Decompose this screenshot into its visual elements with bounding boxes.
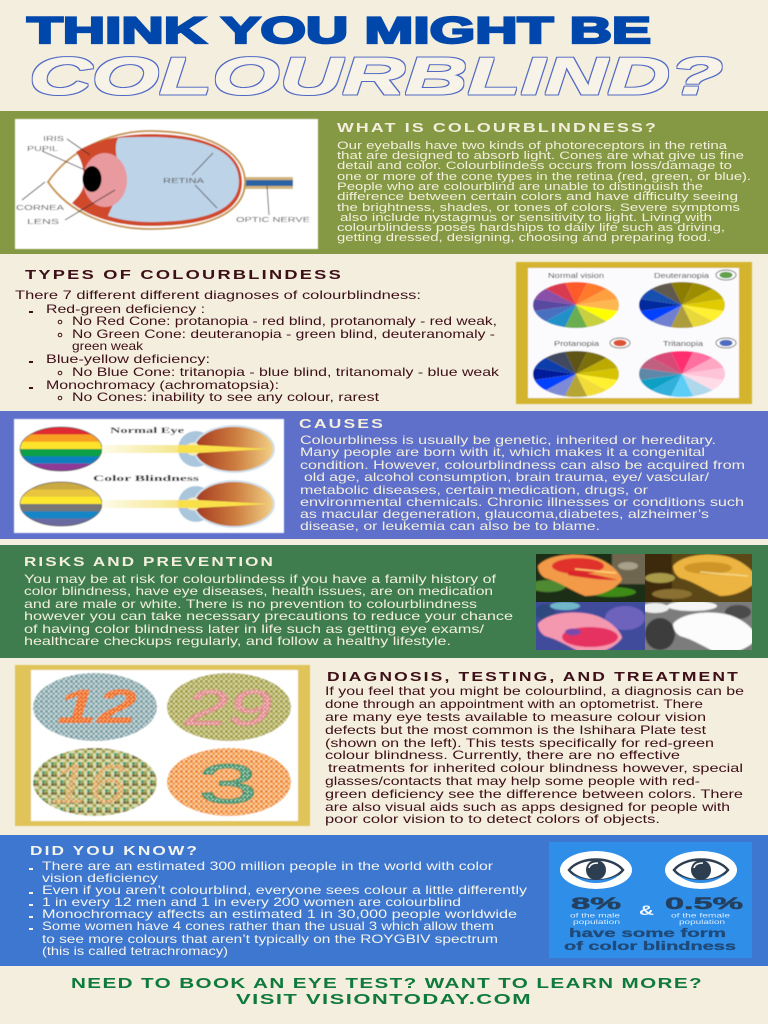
ishihara plate test <box>15 665 310 826</box>
wheel labels <box>548 271 710 348</box>
body text: (shown on the left). This tests specifically for red-green <box>325 736 714 750</box>
body text <box>300 433 745 533</box>
body text: color blindness, have eye diseases, health issues, are on medication <box>24 584 493 598</box>
wheel: protanopia <box>533 351 619 397</box>
icon: eye right <box>665 851 737 889</box>
body text: getting dressed, designing, choosing and preparing food. <box>337 232 711 244</box>
facts list <box>29 859 527 958</box>
icon: green cone missing <box>716 270 736 280</box>
facts list: vision deficiency <box>42 871 158 885</box>
eye: colour blind <box>102 480 275 528</box>
title: colourblind: COLOURBLIND? <box>29 48 723 106</box>
body text: You may be at risk for colourblindess if you have a family history of <box>24 572 497 586</box>
body text: colourblindess poses hardships to daily life such as driving, <box>337 222 725 234</box>
body text: green deficiency see the difference between colors. There <box>325 787 743 801</box>
body text: defects but the most common is the Ishihara Plate test <box>325 723 707 737</box>
body text: the brightness, shades, or tones of colors. Severe symptoms <box>337 202 741 214</box>
body text: difference between certain colors and have difficulty seeing <box>337 191 738 203</box>
body text: disease, or leukemia can also be to blame. <box>300 519 600 533</box>
panel: types of colourblindess <box>15 262 752 404</box>
body text: People who are colourblind are unable to distinguish the <box>337 181 703 193</box>
wheel labels: Protanopia <box>554 339 600 348</box>
plate: 12: 12 <box>57 681 137 734</box>
hibiscus photo quartet <box>536 554 752 650</box>
body text: Many people are born with it, which makes it a congenital <box>300 445 705 459</box>
caption: female: of the female <box>671 912 731 920</box>
plate: 16: 16 <box>50 752 128 815</box>
eye anatomy diagram: CORNEA <box>16 203 64 212</box>
facts list: There are an estimated 300 million people in the world with color <box>42 859 493 873</box>
body text: as macular degeneration, glaucoma,diabetes, alzheimer’s <box>300 507 709 521</box>
body text: colour blindness. Currently, there are no effective <box>325 748 680 762</box>
stat: 0.5%: 0.5% <box>665 894 743 913</box>
body text: detail and color. Colourblindess occurs from loss/damage to <box>337 160 732 172</box>
body text: are many eye tests available to measure colour vision <box>325 710 706 724</box>
photo: monochromacy flower <box>645 602 752 650</box>
photo: deuteranopia flower <box>645 554 752 602</box>
body text: healthcare checkups regularly, and follow a healthy lifestyle. <box>24 634 451 648</box>
eye anatomy diagram <box>15 119 318 249</box>
body text: Colourbliness is usually be genetic, inherited or hereditary. <box>300 433 716 447</box>
heading: DIAGNOSIS, TESTING, AND TREATMENT <box>327 669 740 684</box>
icon: red cone missing <box>610 338 630 348</box>
body text: done through an appointment with an optometrist. There <box>325 697 703 711</box>
body text: environmental chemicals. Chronic illnesses or conditions such <box>300 495 744 509</box>
facts list: Some women have 4 cones rather than the usual 3 which allow them <box>42 919 494 933</box>
body text: however you can take necessary precautions to reduce your chance <box>24 609 513 623</box>
photo: normal vision flower <box>536 554 645 602</box>
diagnoses list: Monochromacy (achromatopsia): <box>46 378 279 392</box>
heading: TYPES OF COLOURBLINDESS <box>25 267 343 282</box>
heading: CAUSES <box>299 416 385 431</box>
body text <box>24 572 513 648</box>
wheel: tritanopia <box>639 351 725 397</box>
body text: poor color vision to to detect colors of objects. <box>325 812 660 826</box>
title: think you might be: THINK YOU MIGHT BE <box>27 10 651 51</box>
plate: 16 <box>33 748 157 816</box>
heading: WHAT IS COLOURBLINDNESS? <box>337 120 658 135</box>
caption: color blindness: Color Blindness <box>93 473 200 483</box>
body text <box>325 684 744 826</box>
caption: normal eye: Normal Eye <box>110 425 184 435</box>
wheel labels: Normal vision <box>548 271 604 280</box>
body text: treatments for inherited colour blindness however, special <box>328 761 743 775</box>
icon: eye left <box>560 851 632 889</box>
call to action <box>71 975 703 1008</box>
eye anatomy diagram: OPTIC NERVE <box>236 215 310 224</box>
rainbow ellipse: normal <box>20 427 102 472</box>
call to action: NEED TO BOOK AN EYE TEST? WANT TO LEARN MORE? <box>71 975 703 992</box>
body text: one or more of the cone types in the retina (red, green, or blue). <box>337 171 751 183</box>
panel: causes <box>0 411 768 539</box>
body text <box>337 140 751 244</box>
eye anatomy diagram: IRIS <box>43 134 64 143</box>
eye anatomy diagram: PUPIL <box>27 144 58 153</box>
photo: tritanopia flower <box>536 602 645 650</box>
wheel labels: Tritanopia <box>663 339 704 348</box>
eye anatomy diagram: RETINA <box>163 176 204 185</box>
caption: male <box>570 912 621 926</box>
diagnoses list: No Red Cone: protanopia - red blind, protanomaly - red weak, <box>72 314 497 328</box>
body text: old age, alcohol consumption, brain trauma, eye/ vascular/ <box>304 470 710 484</box>
colour wheel comparison <box>516 262 752 404</box>
stat: 8%: 8% <box>571 894 621 913</box>
rainbow ellipse: colour blind <box>20 482 102 527</box>
plate: 12 <box>33 673 157 741</box>
body text: Our eyeballs have two kinds of photoreceptors in the retina <box>337 140 728 152</box>
have some form of color blindness: of color blindness <box>564 939 737 953</box>
normal eye versus colour blindness diagram <box>14 419 284 533</box>
wheel: normal vision <box>533 282 619 328</box>
caption: female <box>671 912 731 926</box>
eye anatomy diagram: LENS <box>27 217 59 226</box>
caption: male: population <box>573 919 621 926</box>
heading: RISKS AND PREVENTION <box>24 554 275 569</box>
body text: condition. However, colourblindness can also be acquired from <box>300 458 745 472</box>
diagnoses list: No Green Cone: deuteranopia - green blind, deuteranomaly - <box>72 327 495 341</box>
body text: that are designed to absorb light. Cones are what give us fine <box>337 150 744 162</box>
diagnoses list: green weak <box>72 339 144 353</box>
diagnoses list: No Cones: inability to see any colour, rarest <box>72 390 380 404</box>
body text: and are male or white. There is no prevention to colourblindness <box>24 597 477 611</box>
facts list: 1 in every 12 men and 1 in every 200 women are colourblind <box>42 895 461 909</box>
plate: 29 <box>167 673 291 741</box>
wheel: deuteranopia <box>639 282 725 328</box>
body text: are also visual aids such as apps designed for people with <box>325 800 730 814</box>
body text: of having color blindness later in life such as getting eye exams/ <box>24 622 485 636</box>
body text: also include nystagmus or sensitivity to light. Living with <box>340 212 712 224</box>
plate: 3 <box>167 748 291 816</box>
body text: metabolic diseases, certain medication, drugs, or <box>300 483 648 497</box>
diagnoses list <box>15 288 500 404</box>
panel: did you know <box>0 835 768 966</box>
diagnoses list: Red-green deficiency : <box>46 302 205 316</box>
diagnoses list: Blue-yellow deficiency: <box>46 352 210 366</box>
ampersand: & <box>639 902 654 918</box>
facts list: to see more colours that aren’t typically on the ROYGBIV spectrum <box>42 932 498 946</box>
diagnoses list: There 7 different different diagnoses of colourblindness: <box>15 288 421 302</box>
statistics card <box>549 842 752 958</box>
heading: DID YOU KNOW? <box>30 843 199 858</box>
icon: blue cone missing <box>716 338 736 348</box>
body text: If you feel that you might be colourblind, a diagnosis can be <box>325 684 744 698</box>
body text: glasses/contacts that may help some people with red- <box>325 774 700 788</box>
caption: male: of the male <box>570 912 621 920</box>
wheel labels: Deuteranopia <box>654 271 710 280</box>
plate: 3: 3 <box>198 752 258 815</box>
call to action: VISIT VISIONTODAY.COM <box>236 991 532 1008</box>
diagnoses list: No Blue Cone: tritanopia - blue blind, tritanomaly - blue weak <box>72 365 500 379</box>
facts list: (this is called tetrachromacy) <box>42 944 228 958</box>
panel: risks and prevention <box>0 545 768 658</box>
facts list: Monochromacy affects an estimated 1 in 30,000 people worldwide <box>42 907 517 921</box>
facts list: Even if you aren’t colourblind, everyone sees colour a little differently <box>42 883 527 897</box>
plate: 29: 29 <box>183 680 272 736</box>
have some form of color blindness <box>564 926 737 953</box>
caption: female: population <box>679 919 726 926</box>
panel: what is colourblindness <box>0 111 768 254</box>
eye: normal <box>102 425 275 473</box>
have some form of color blindness: have some form <box>569 926 726 940</box>
panel: diagnosis, testing and treatment <box>15 665 744 826</box>
